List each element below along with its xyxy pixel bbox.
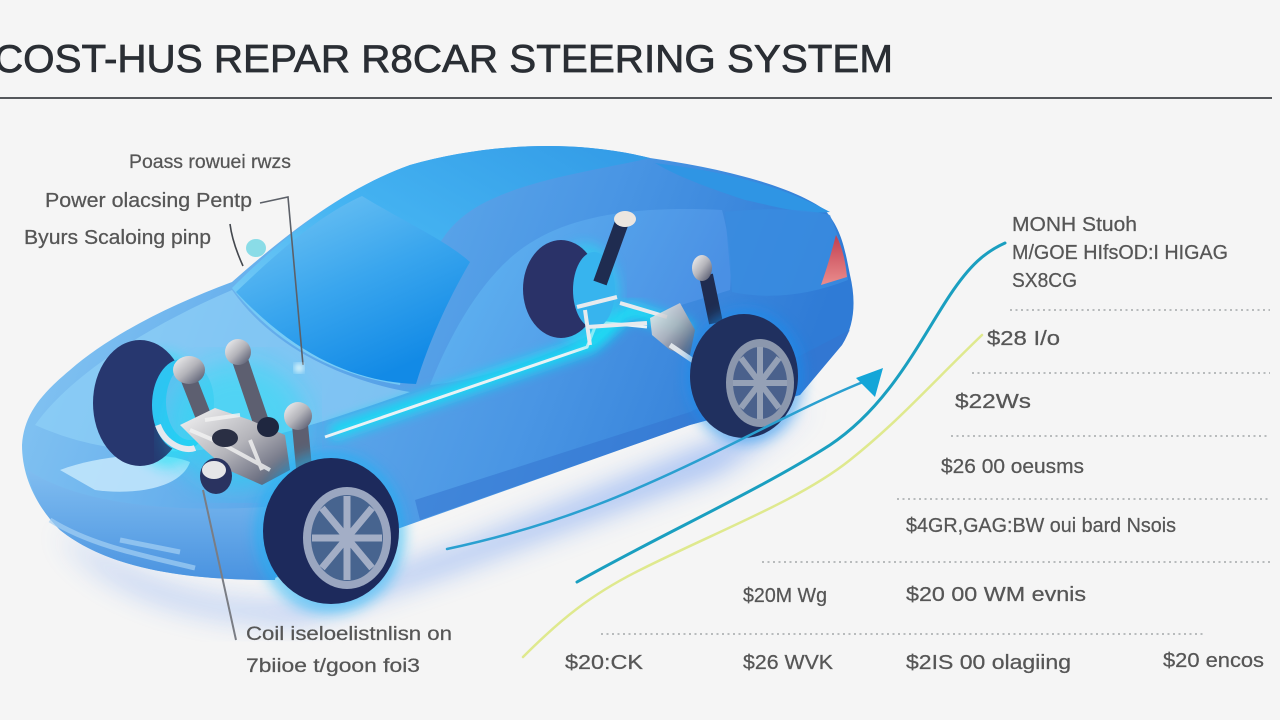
lower left label: Coil iseloelistnlisn on xyxy=(246,624,452,645)
title rule xyxy=(0,97,1272,99)
car body xyxy=(22,146,854,580)
arrowhead xyxy=(856,368,883,397)
headlight xyxy=(60,455,190,492)
cost heading: MONH Stuoh xyxy=(1012,214,1137,236)
trunk lid xyxy=(725,209,848,296)
car illustration xyxy=(22,146,854,620)
lower left label: 7biioe t/goon foi3 xyxy=(246,656,420,677)
far front wheel xyxy=(93,340,214,468)
roof panel xyxy=(232,146,650,385)
cost values: $4GR,GAG:BW oui bard Nsois xyxy=(906,515,1176,537)
ground glow xyxy=(60,405,810,620)
far rear wheel xyxy=(523,240,620,347)
cost values: $2IS 00 olagiing xyxy=(906,652,1071,674)
pump labels: Byurs Scaloing pinp xyxy=(24,227,211,249)
bumper intake xyxy=(50,520,195,568)
cost values: $28 I/o xyxy=(987,328,1060,350)
rear window xyxy=(655,163,830,213)
cost values: $22Ws xyxy=(955,391,1031,413)
rear wheel xyxy=(685,308,805,444)
cost values: $20:CK xyxy=(565,652,644,674)
cost trend curves xyxy=(447,243,1005,657)
cost heading: M/GOE HIfsOD:I HIGAG xyxy=(1012,242,1228,264)
tail light xyxy=(821,235,847,285)
rear steering assembly xyxy=(577,211,716,362)
callout leaders xyxy=(203,197,304,640)
cost heading: SX8CG xyxy=(1012,270,1077,292)
front bumper xyxy=(28,470,290,580)
title: COST-HUS REPAR R8CAR STEERING SYSTEM xyxy=(0,38,893,81)
pump labels xyxy=(24,152,291,249)
cost values: $26 WVK xyxy=(743,652,834,674)
cost values: $20 encos xyxy=(1163,650,1264,672)
front steering assembly xyxy=(158,339,312,494)
side window xyxy=(430,209,731,385)
dotted grid xyxy=(601,310,1270,634)
door sill xyxy=(415,330,850,520)
front wheel xyxy=(254,450,406,614)
hood highlight xyxy=(35,290,410,451)
windshield xyxy=(236,196,470,384)
cost values: $20 00 WM evnis xyxy=(906,584,1086,606)
pump labels: Poass rowuei rwzs xyxy=(129,152,291,173)
cost values: $20M Wg xyxy=(743,585,827,607)
cyan brake line xyxy=(325,310,690,437)
cost heading xyxy=(1012,214,1228,292)
pump labels: Power olacsing Pentp xyxy=(45,190,252,212)
cost values: $26 00 oeusms xyxy=(941,456,1084,478)
cost values xyxy=(565,328,1264,674)
lower left label xyxy=(246,624,452,677)
